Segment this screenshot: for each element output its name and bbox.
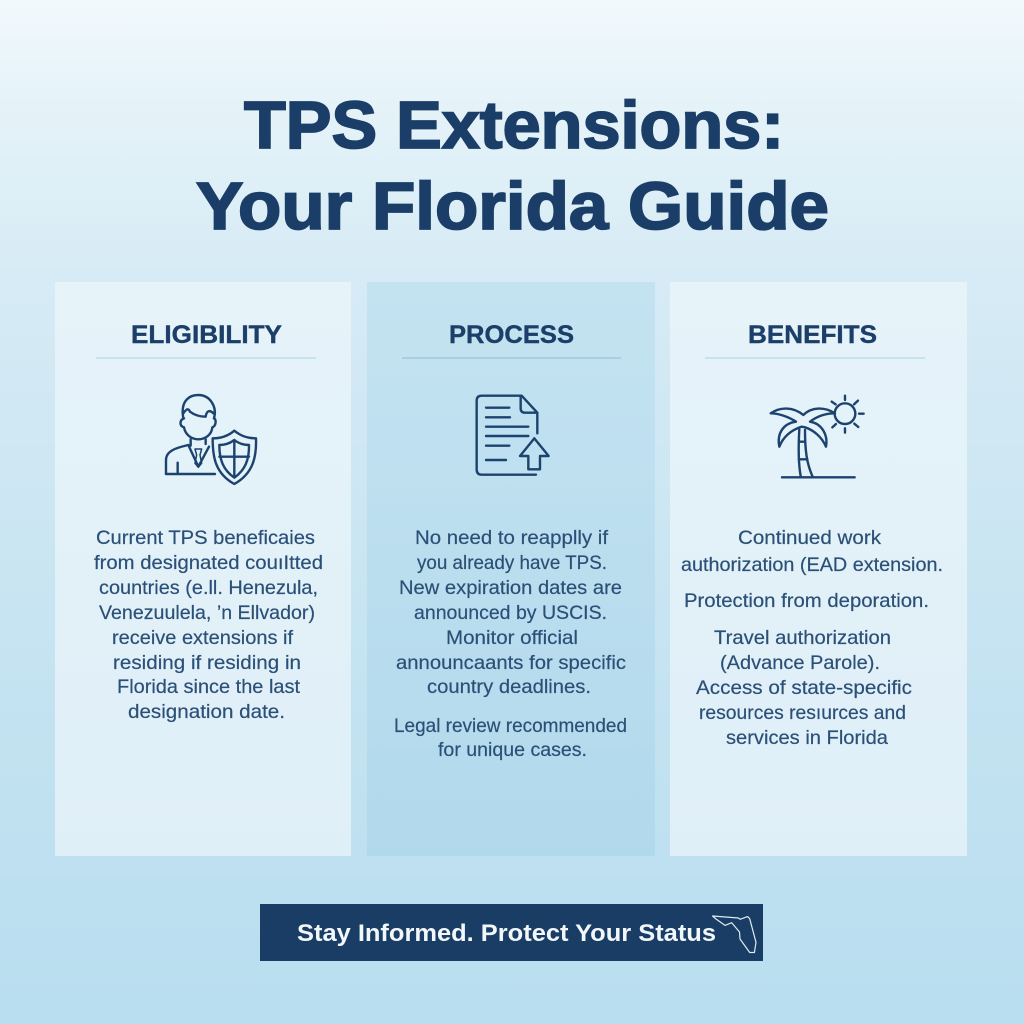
text: benefits body: services in Florida [726,727,888,749]
text: benefits body: Continued work [738,527,881,549]
panel: benefits [670,282,967,856]
text: eligibility body: residing if residing in [113,652,301,674]
text: process body: announcaants for specific [396,652,626,674]
text: process body: for unique cases. [438,739,587,761]
text: eligibility body: Current TPS beneficaies [96,527,315,549]
title: Your Florida Guide [196,170,829,244]
heading: benefits: BENEFITS [748,321,877,349]
icon: document with upload arrow [477,396,549,475]
text: process body: Monitor official [446,627,578,649]
icon: Florida outline [712,916,756,952]
panel: process [367,282,655,856]
text: benefits body: Protection from deporation. [684,590,929,612]
text: eligibility body: from designated couıItted [94,552,323,574]
text: process body: New expiration dates are [399,577,622,599]
text: eligibility body: designation date. [128,701,285,723]
text: eligibility body: Florida since the last [117,676,301,698]
text: benefits body: authorization (EAD extension. [681,554,943,576]
title [196,89,829,244]
text: eligibility body: countries (e.ll. Henezula, [99,577,318,599]
text: eligibility body: receive extensions if [112,627,294,649]
text: process body [394,527,627,761]
heading: process: PROCESS [449,321,574,349]
text: process body: you already have TPS. [417,552,607,574]
banner text: Stay Informed. Protect Your Status [297,920,716,947]
panel: eligibility [55,282,351,856]
text: benefits body: Travel authorization [714,627,891,649]
text: process body: announced by USCIS. [414,602,607,624]
text: process body: country deadlines. [427,676,591,698]
banner: call to action [260,904,763,961]
heading: eligibility: ELIGIBILITY [131,321,282,349]
text: process body: Legal review recommended [394,715,627,737]
text: benefits body: resources resıurces and [699,702,906,724]
text: benefits body [681,527,943,749]
icon: palm tree and sun [771,396,864,477]
text: benefits body: Access of state-specific [696,677,912,699]
text: process body: No need to reapplly if [415,527,609,549]
text: eligibility body: Venezuulela, ’n Ellvador) [99,602,315,624]
text: benefits body: (Advance Parole). [720,652,880,674]
icon: person with shield [166,395,256,484]
title: TPS Extensions: [244,89,784,163]
text: eligibility body [94,527,323,723]
